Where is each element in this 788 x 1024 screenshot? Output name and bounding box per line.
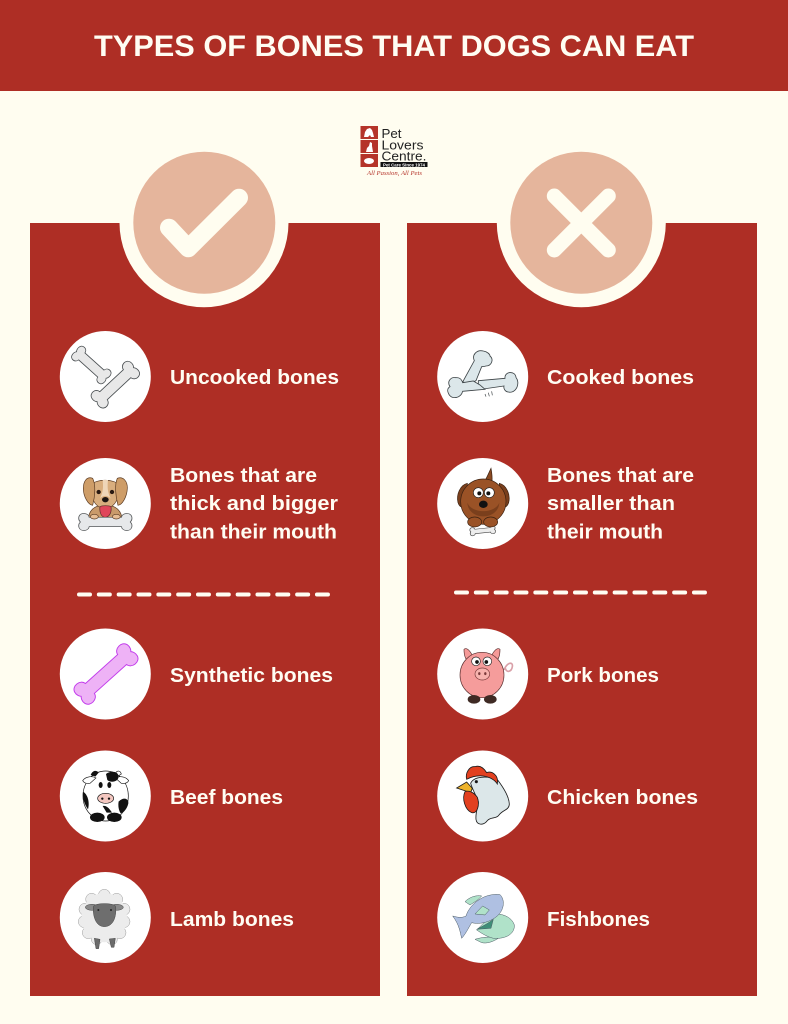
logo: Pet Lovers Centre <box>360 126 428 177</box>
icon: cow <box>83 771 129 822</box>
label: than their mouth <box>170 520 337 544</box>
row: chicken bones <box>437 750 698 842</box>
header banner <box>0 0 788 91</box>
logo: Pet Lovers Centre: Pet Care Since 1974 <box>383 162 425 167</box>
icon: pig <box>460 649 512 704</box>
label: Synthetic bones <box>170 664 333 687</box>
label: their mouth <box>547 520 663 544</box>
label: Uncooked bones <box>170 366 339 389</box>
row: lamb bones <box>60 872 294 963</box>
icon: puppy with bone <box>79 478 132 530</box>
title: TYPES OF BONES THAT DOGS CAN EAT <box>94 30 694 63</box>
row: pork bones <box>437 628 659 720</box>
logo: Pet Lovers Centre: All Passion, All Pets <box>366 170 422 177</box>
dashed divider <box>456 590 707 594</box>
row: cooked bones <box>437 331 694 422</box>
icon: pink bone <box>71 641 141 707</box>
label: smaller than <box>547 492 675 515</box>
label: thick and bigger <box>170 492 338 515</box>
label: Bones that are <box>547 464 694 487</box>
logo: Pet Lovers Centre: Lovers <box>382 138 424 152</box>
icon: broken bones <box>448 351 518 398</box>
logo: Pet Lovers Centre: Centre. <box>382 150 426 164</box>
icon: cross mark badge <box>510 152 652 294</box>
label: Chicken bones <box>547 786 698 809</box>
icon: sheep <box>78 889 130 949</box>
dashed divider <box>79 592 330 596</box>
label: Beef bones <box>170 786 283 809</box>
logo: Pet Lovers Centre: Pet <box>382 127 402 141</box>
label: Lamb bones <box>170 908 294 931</box>
row: synthetic bones <box>60 628 333 720</box>
icon: two bones <box>70 345 142 410</box>
icon: chicken head <box>457 766 509 824</box>
icon: two fish <box>453 894 514 943</box>
panel: bones dogs can eat <box>30 138 380 996</box>
label: Cooked bones <box>547 366 694 389</box>
icon: brown dog with small bone <box>457 468 509 536</box>
row: bones bigger than their mouth <box>60 458 338 549</box>
row: bones smaller than their mouth <box>437 458 694 549</box>
row: fishbones <box>437 872 650 963</box>
icon: check mark badge <box>133 152 275 294</box>
label: Bones that are <box>170 464 317 487</box>
row: uncooked bones <box>60 331 339 422</box>
row: beef bones <box>60 750 283 842</box>
label: Fishbones <box>547 908 650 931</box>
panel: bones dogs cannot eat <box>407 138 757 996</box>
label <box>547 464 694 544</box>
label <box>170 464 338 544</box>
label: Pork bones <box>547 664 659 687</box>
